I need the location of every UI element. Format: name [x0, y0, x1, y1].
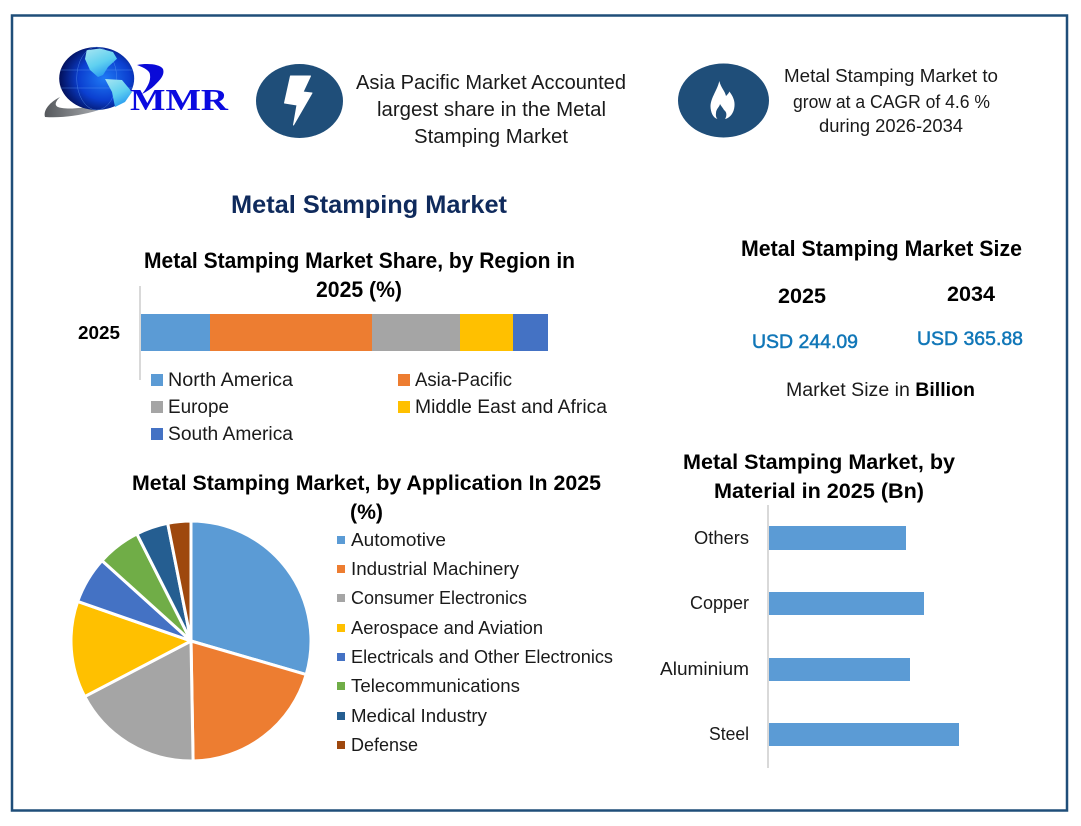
icon: flame: [678, 64, 769, 138]
heading: share by region: Metal Stamping Market Share, by Region in: [144, 248, 575, 273]
heading: by application: [132, 472, 601, 524]
callout: Asia Pacific share: Asia Pacific Market Accounted: [356, 72, 626, 94]
legend: applications: Aerospace and Aviation: [351, 618, 543, 638]
legend: regions: [151, 370, 607, 445]
unit note: Market Size in Billion: [786, 380, 975, 401]
legend: applications: Automotive: [351, 530, 446, 550]
callout: CAGR: Metal Stamping Market to: [784, 66, 998, 86]
legend: regions: North America: [168, 370, 293, 391]
title: Metal Stamping Market: [231, 191, 508, 219]
year 2025: 2025: [778, 285, 826, 308]
heading: share by region: 2025 (%): [316, 277, 402, 302]
callout: CAGR: grow at a CAGR of 4.6 %: [793, 92, 990, 112]
callout: Asia Pacific share: [356, 72, 626, 148]
legend: applications: Medical Industry: [351, 706, 487, 726]
legend: applications: Telecommunications: [351, 676, 520, 696]
value 2025: USD 244.09: [752, 332, 858, 353]
heading: by application: Metal Stamping Market, by Application In 2025: [132, 472, 601, 495]
logo: MMR globe: MMR: [130, 82, 229, 117]
heading: by application: (%): [350, 501, 383, 524]
heading: share by region: [144, 248, 575, 302]
heading: market size: Metal Stamping Market Size: [741, 236, 1022, 261]
year 2034: 2034: [947, 283, 995, 306]
callout: Asia Pacific share: largest share in the Metal: [377, 99, 606, 121]
callout: CAGR: [784, 66, 998, 136]
legend: applications: [337, 530, 613, 755]
legend: regions: Middle East and Africa: [415, 397, 607, 418]
bar chart: material: Aluminium: [660, 659, 749, 679]
callout: Asia Pacific share: Stamping Market: [414, 126, 568, 148]
value 2034: USD 365.88: [917, 329, 1023, 350]
icon: lightning bolt: [256, 64, 343, 138]
bar chart: material: [660, 505, 959, 768]
stacked bar chart: region share: [78, 286, 548, 380]
legend: applications: Industrial Machinery: [351, 559, 519, 579]
callout: CAGR: during 2026-2034: [819, 116, 963, 136]
heading: by material: Material in 2025 (Bn): [714, 480, 924, 503]
bar chart: material: Copper: [690, 593, 749, 613]
legend: applications: Electricals and Other Electronics: [351, 647, 613, 667]
legend: regions: Asia-Pacific: [415, 370, 512, 391]
heading: by material: [683, 451, 955, 503]
stacked bar chart: region share: 2025: [78, 323, 120, 343]
legend: regions: South America: [168, 424, 293, 445]
pie chart: application: [71, 521, 311, 761]
heading: by material: Metal Stamping Market, by: [683, 451, 955, 474]
bar chart: material: Others: [694, 528, 749, 548]
logo: MMR globe: [45, 47, 229, 117]
legend: applications: Defense: [351, 735, 418, 755]
legend: regions: Europe: [168, 397, 229, 418]
panel: market size: [741, 236, 1023, 401]
legend: applications: Consumer Electronics: [351, 588, 527, 608]
bar chart: material: Steel: [709, 724, 749, 744]
